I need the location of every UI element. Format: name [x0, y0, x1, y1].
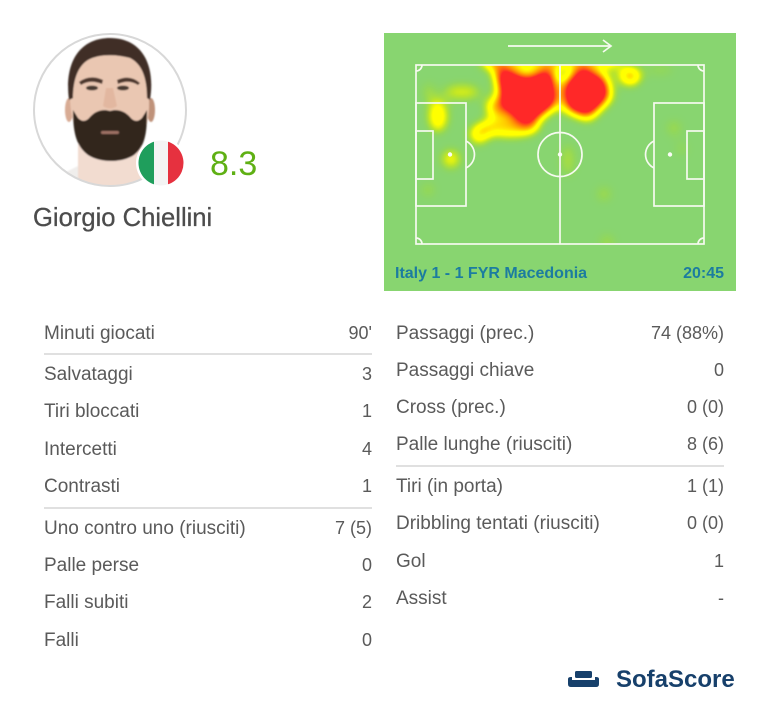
stat: tiri bloccati: 1 — [362, 401, 372, 421]
stat: falli — [44, 630, 372, 651]
stat: salvataggi: 3 — [362, 364, 372, 384]
stat: tiri in porta — [396, 476, 724, 497]
stat: falli subiti: 2 — [362, 592, 372, 612]
stat: dribbling: Dribbling tentati (riusciti) — [396, 513, 600, 534]
stat: gol — [396, 551, 724, 572]
icon: sofa logo — [568, 671, 599, 687]
stat: contrasti — [44, 476, 372, 497]
stat: cross: 0 (0) — [687, 397, 724, 417]
stat: palle perse — [44, 555, 372, 576]
stat: gol: Gol — [396, 551, 426, 572]
panel: heatmap — [384, 33, 736, 291]
stat: falli subiti — [44, 592, 372, 613]
panel: left stats — [44, 323, 372, 651]
stat: falli subiti: Falli subiti — [44, 592, 128, 613]
stat: passaggi chiave — [396, 360, 724, 381]
stat: salvataggi — [44, 364, 372, 385]
stat: gol: 1 — [714, 551, 724, 571]
stat: salvataggi: Salvataggi — [44, 364, 133, 385]
stat: tiri in porta: Tiri (in porta) — [396, 476, 503, 497]
stat: uno contro uno: Uno contro uno (riusciti) — [44, 518, 246, 539]
stat: assist: - — [718, 588, 724, 608]
brand name: SofaScore — [616, 666, 735, 693]
stat: passaggi: Passaggi (prec.) — [396, 323, 534, 344]
stat: intercetti: 4 — [362, 439, 372, 459]
stat: tiri bloccati — [44, 401, 372, 422]
stat: dribbling: 0 (0) — [687, 513, 724, 533]
stat: minuti giocati: 90' — [349, 323, 372, 343]
stat: intercetti: Intercetti — [44, 439, 117, 460]
stat: minuti giocati: Minuti giocati — [44, 323, 155, 344]
stat: uno contro uno: 7 (5) — [335, 518, 372, 538]
stat: passaggi chiave: Passaggi chiave — [396, 360, 534, 381]
stat: dribbling — [396, 513, 724, 534]
stat: palle lunghe: 8 (6) — [687, 434, 724, 454]
player portrait — [33, 33, 187, 187]
stat: uno contro uno — [44, 518, 372, 539]
pitch lines — [416, 65, 704, 244]
stat: contrasti: Contrasti — [44, 476, 120, 497]
stat: palle perse: Palle perse — [44, 555, 139, 576]
stat: intercetti — [44, 439, 372, 460]
stat: cross: Cross (prec.) — [396, 397, 506, 418]
arrow: attack direction — [508, 40, 611, 52]
match score: Italy 1 - 1 FYR Macedonia — [395, 265, 587, 282]
player rating: 8.3 — [210, 145, 257, 183]
stat: contrasti: 1 — [362, 476, 372, 496]
stat: falli: 0 — [362, 630, 372, 650]
stat: palle lunghe — [396, 434, 724, 455]
stat: passaggi — [396, 323, 724, 344]
panel: right stats — [396, 323, 724, 609]
stat: tiri in porta: 1 (1) — [687, 476, 724, 496]
stat: palle perse: 0 — [362, 555, 372, 575]
stat: assist: Assist — [396, 588, 447, 609]
heatmap blobs — [420, 66, 686, 243]
stat: assist — [396, 588, 724, 609]
stat: passaggi: 74 (88%) — [651, 323, 724, 343]
stat: cross — [396, 397, 724, 418]
match time: 20:45 — [683, 265, 724, 282]
stat: tiri bloccati: Tiri bloccati — [44, 401, 139, 422]
icon: Italy flag — [136, 140, 184, 186]
player name: Giorgio Chiellini — [33, 204, 212, 232]
stat: palle lunghe: Palle lunghe (riusciti) — [396, 434, 572, 455]
stat: falli: Falli — [44, 630, 79, 651]
stat: passaggi chiave: 0 — [714, 360, 724, 380]
stat: minuti giocati — [44, 323, 372, 344]
